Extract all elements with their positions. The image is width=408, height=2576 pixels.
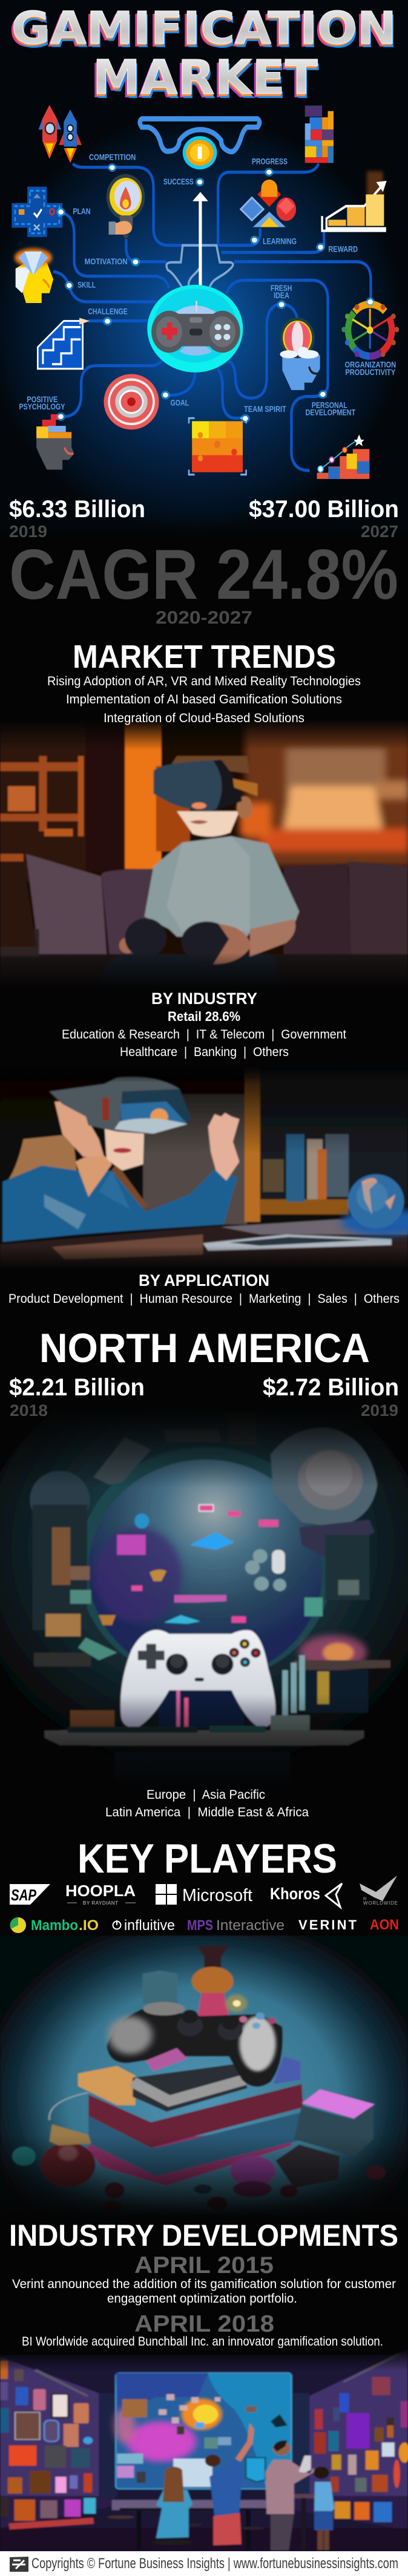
by application text [8,1271,400,1306]
market trends text: Rising Adoption of AR, VR and Mixed Reality Technologies [47,674,361,688]
logo: Microsoft [156,1884,252,1905]
table and stools [108,2494,316,2551]
neon pieces inside portal [99,1505,323,1625]
dark controller [107,2002,283,2087]
industry developments text: Verint announced the addition of its gamification solution for customer [12,2277,396,2291]
icon: coin stairs reward [322,171,387,231]
icon: trident and central arrow [166,192,233,304]
title: GAMIFICATION [12,2,396,54]
node labels: CHALLENGE [88,306,128,316]
industry developments text: APRIL 2015 [134,2252,274,2278]
panel: gamification mind map [0,0,408,556]
logo: Mambo.IO: .IO [79,1917,99,1934]
icon: wings and coin [140,119,260,169]
boy [99,756,299,997]
logo: Aon: AON [370,1917,399,1933]
industry developments text [9,2219,398,2349]
north america text: $2.21 Billion [9,1374,145,1401]
logo: Mambo.IO: Mambo [31,1917,78,1934]
title: MARKET [92,53,317,108]
by industry text: Retail 28.6% [168,1009,240,1024]
logo: MPS Interactive: Interactive [216,1917,285,1934]
title: MARKET [93,51,318,105]
icon: head with tetris blocks [36,414,74,470]
node labels: MOTIVATION [85,256,128,266]
node labels: PROGRESS [252,156,288,166]
north america text: 2018 [10,1401,48,1420]
icon: plan dpad [12,187,62,237]
title: GAMIFICATION [9,5,394,57]
other regions text [105,1788,309,1819]
photo: boy with VR headset on sofa [0,702,408,1013]
by industry text: BY INDUSTRY [151,990,257,1008]
debris top and machinery [30,1409,377,1557]
market trends text: Implementation of AI based Gamification Solutions [66,693,342,706]
globe [348,1174,404,1228]
icon: stairs challenge [38,318,90,369]
node labels: DEVELOPMENT [306,408,355,417]
node labels: ORGANIZATION [344,360,396,370]
by application text: BY APPLICATION [139,1271,269,1290]
logo: Khoros [270,1883,342,1907]
market size and CAGR: $37.00 Billion [249,496,399,523]
icon: diamond head [15,249,53,303]
icon: fortune business insights logo [10,2557,28,2572]
icon: personal development steps [317,434,369,479]
bookshelf background [143,1064,408,1224]
logo: Influitive: influitive [124,1917,175,1934]
icon: progress shapes [241,180,296,227]
footer [0,2551,408,2576]
node labels: GOAL [171,397,189,408]
node labels: SUCCESS [163,177,194,186]
node labels: FRESH [271,283,292,293]
industry developments text: engagement optimization portfolio. [107,2292,297,2306]
icon: bulb and hand [107,174,145,239]
other regions text: Latin America | Middle East & Africa [105,1805,309,1819]
shelf [44,1715,364,1781]
girl [2,1101,239,1242]
ball, mushroom and pieces [12,2093,386,2212]
industry developments text: APRIL 2018 [134,2311,274,2337]
icon: target maze [104,374,159,429]
photo: family at game wall [0,2348,408,2551]
dark base behind controller [159,1691,245,1728]
market size and CAGR: 2019 [9,522,47,541]
node labels: PRODUCTIVITY [345,367,395,377]
north america text: $2.72 Billion [263,1374,399,1401]
market size and CAGR [9,496,399,628]
market size and CAGR: $6.33 Billion [9,496,145,523]
key player logos [10,1876,399,1934]
desk and tablet [0,1208,408,1267]
logo: MPS Interactive [187,1917,285,1934]
node labels: SKILL [77,280,96,290]
market trends text: Integration of Cloud-Based Solutions [104,711,304,725]
icon: tetris tower [305,105,334,163]
icon: productivity wheel [339,293,401,367]
logo: Microsoft: Microsoft [182,1886,252,1905]
shelves background [0,706,86,881]
logo: Khoros: Khoros [270,1885,320,1903]
node labels: TEAM SPIRIT [244,404,286,414]
icon: jigsaw puzzle [189,418,246,475]
node labels: LEARNING [263,236,297,246]
other regions text: Europe | Asia Pacific [146,1788,265,1802]
white game controller [120,1630,275,1728]
photo: game world portal with white controller [0,1270,408,1790]
node labels: COMPETITION [89,152,136,162]
market trends text [47,639,361,725]
icon: rockets [39,105,82,163]
background darkening [0,1059,408,1154]
title [9,2,398,109]
node labels: POSITIVE [27,394,58,404]
logo: Hoopla: BY RAYDIANT [83,1900,118,1906]
connector lines [53,163,370,471]
side walls [0,2349,408,2551]
orange door glow [86,706,190,872]
heading: key players: KEY PLAYERS [77,1836,337,1882]
logo: BI Worldwide: WORLDWIDE [363,1900,398,1906]
market trends text: MARKET TRENDS [73,639,336,675]
market size and CAGR: 2020-2027 [156,608,252,628]
objects behind [143,1946,247,2016]
title: MARKET [90,54,315,109]
node labels: PLAN [73,206,91,216]
node labels: REWARD [328,244,358,254]
icon: central gamepad [147,285,243,373]
node labels: PSYCHOLOGY [19,402,65,411]
node labels: IDEA [274,290,289,300]
portal [78,1447,333,1683]
logo: Verint: VERINT [298,1917,357,1932]
photo: girl with VR headset at desk [0,1051,408,1274]
by industry text: Healthcare | Banking | Others [120,1045,289,1059]
logo: BI Worldwide: BI [363,1897,367,1901]
title: GAMIFICATION [13,6,398,58]
glowing nodes [56,163,375,423]
icon: balloon head [280,318,320,390]
title: MARKET [94,55,319,109]
headset [50,1077,191,1134]
by industry text: Education & Research | IT & Telecom | Government [62,1028,346,1042]
node labels [19,152,396,417]
blurred lamp room [239,708,408,866]
sofa [0,854,408,1004]
people [156,2424,334,2551]
logo: Mambo.IO [10,1917,99,1934]
right stack [282,1535,390,1715]
photo: controller on stack of books [0,1935,408,2229]
central game screen [114,2373,291,2489]
north america text [9,1325,399,1420]
north america text: NORTH AMERICA [39,1325,370,1371]
book stack [78,2056,375,2188]
node labels: PERSONAL [312,400,347,410]
left stack [33,1505,117,1728]
title: GAMIFICATION [11,4,396,56]
north america text: 2019 [361,1401,398,1420]
logo: Hoopla: HOOPLA [65,1882,136,1900]
right wall pictures [314,2377,408,2522]
logo: SAP: SAP [11,1886,37,1904]
logo: BI Worldwide [360,1876,398,1906]
market size and CAGR: 2027 [361,522,398,541]
left wall pictures [0,2361,96,2529]
by industry text [62,990,346,1059]
logo: MPS Interactive: MPS [187,1917,213,1934]
